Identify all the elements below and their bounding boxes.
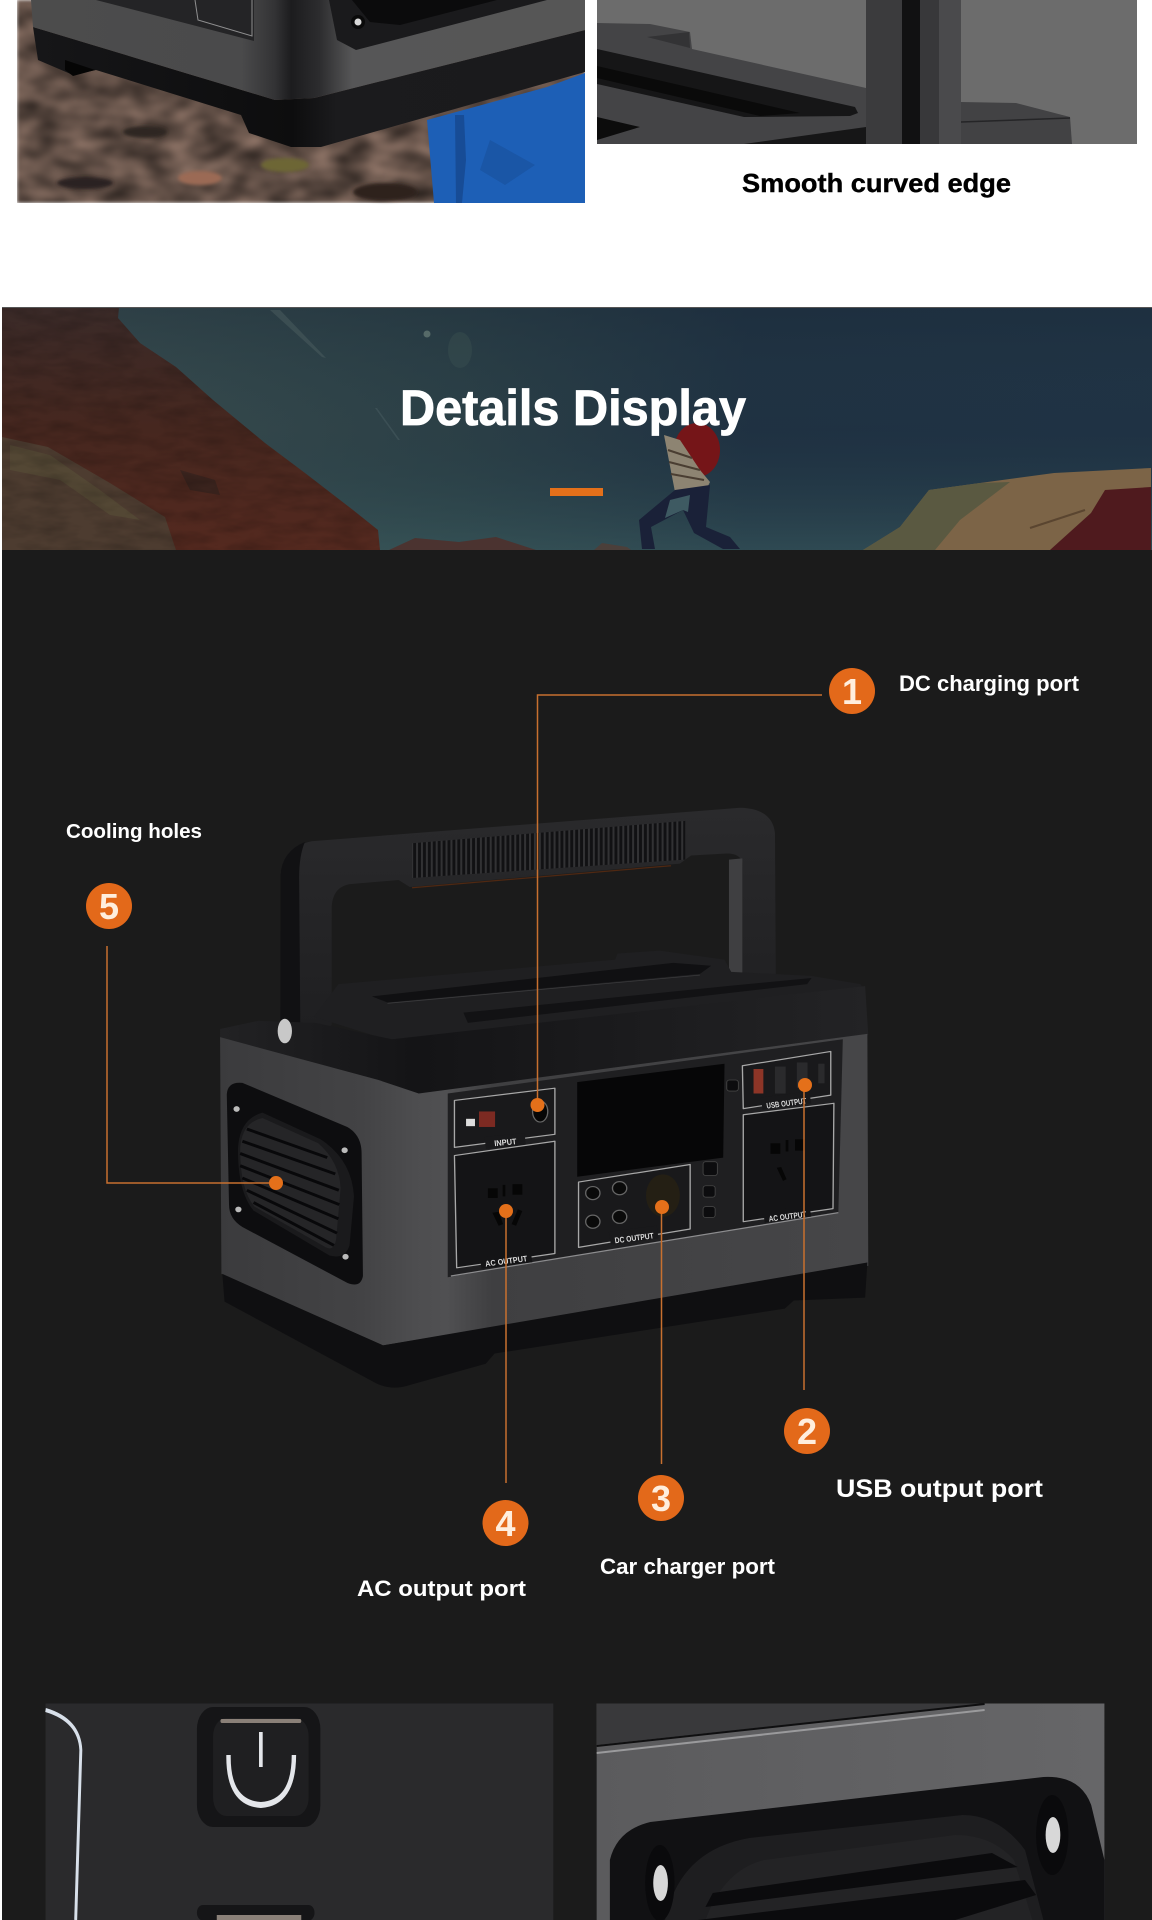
callout 2: USB output port: USB output port — [836, 1475, 1044, 1503]
blotchy ground — [17, 0, 585, 203]
hiker — [639, 423, 740, 549]
DC box: DC OUTPUT — [614, 1231, 655, 1245]
top band — [220, 986, 868, 1095]
callout 3: Car charger port: 3 — [651, 1478, 671, 1519]
USB box: USB OUTPUT — [766, 1096, 808, 1110]
lid — [314, 951, 865, 1041]
front panel — [448, 1039, 843, 1277]
heading: Details Display: Details Display — [400, 380, 746, 436]
jeans — [427, 73, 585, 203]
display screen — [577, 1064, 725, 1177]
callout 2: USB output port: 2 — [797, 1411, 817, 1452]
product: portable power station — [220, 808, 868, 1388]
callout 1: DC charging port — [530, 668, 1080, 1112]
mountain left — [2, 307, 380, 550]
callout 4: AC output port: AC output port — [357, 1576, 527, 1601]
callout 1: DC charging port: 1 — [842, 671, 862, 712]
side vent — [227, 1083, 363, 1285]
handle — [280, 808, 776, 1045]
front panel — [96, 0, 254, 41]
hill right — [863, 468, 1151, 550]
callout 4: AC output port: 4 — [495, 1503, 516, 1544]
right AC box — [743, 1103, 834, 1224]
orange heading bar — [550, 488, 603, 496]
callout 3: Car charger port: Car charger port — [600, 1554, 776, 1579]
photo: device bottom corner on ground — [17, 0, 585, 203]
body grey — [220, 1034, 868, 1345]
section banner with hiker landscape — [2, 307, 1152, 551]
USB box — [742, 1051, 831, 1110]
handle pivot — [278, 1019, 292, 1043]
left AC box — [454, 1141, 555, 1269]
callout 4: AC output port — [357, 1204, 528, 1601]
detail photo: power button close-up — [46, 1704, 553, 1920]
caption: smooth curved edge: Smooth curved edge — [742, 168, 1011, 198]
right AC box: AC OUTPUT — [768, 1209, 808, 1224]
callout 1: DC charging port: DC charging port — [899, 671, 1080, 696]
grey body — [31, 0, 585, 100]
sky streaks — [270, 310, 326, 358]
DC box — [579, 1165, 690, 1247]
rocks on horizon — [389, 537, 536, 550]
lid — [597, 23, 866, 144]
black base — [33, 27, 585, 147]
control buttons — [703, 1080, 738, 1218]
callout 3: Car charger port — [600, 1200, 776, 1579]
photo: smooth curved edge close-up — [597, 0, 1137, 144]
callout 5: Cooling holes — [66, 821, 283, 1190]
input box — [454, 1088, 555, 1149]
vent frame — [329, 0, 547, 50]
callout 5: Cooling holes: 5 — [99, 886, 119, 927]
right foot block — [961, 102, 1072, 144]
handle grip ribs — [412, 821, 685, 878]
callout 2: USB output port — [784, 1078, 1044, 1503]
black base — [222, 1262, 867, 1388]
dark details panel — [2, 550, 1152, 1920]
detail photo: cooling vent close-up — [597, 1704, 1104, 1920]
input box: INPUT — [494, 1136, 518, 1148]
vertical handle arm — [866, 0, 902, 144]
left AC box: AC OUTPUT — [485, 1254, 529, 1268]
callout 5: Cooling holes: Cooling holes — [66, 821, 202, 843]
